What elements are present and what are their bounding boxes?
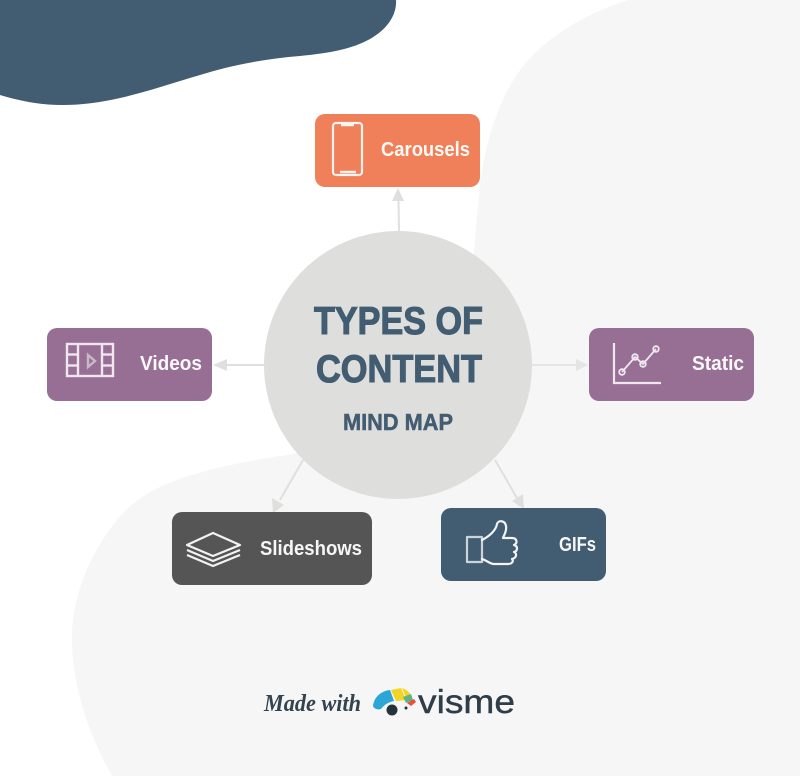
- made with text: Made with: [263, 691, 361, 717]
- label: Videos: [140, 353, 202, 375]
- branding: Made with Visme: [263, 683, 515, 720]
- label: Carousels: [381, 139, 470, 161]
- icon: visme logo: [373, 688, 416, 716]
- label: Slideshows: [260, 538, 362, 560]
- arrow: to Slideshows: [272, 460, 303, 513]
- node: Static: [589, 328, 754, 401]
- arrow: to Carousels: [392, 188, 404, 232]
- icon: line chart: [614, 343, 661, 383]
- icon: film strip: [67, 344, 113, 376]
- node: GIFs: [441, 508, 606, 581]
- subtitle: MIND MAP: [343, 409, 453, 435]
- arrow: to Static: [531, 359, 588, 371]
- icon: layers: [187, 533, 240, 566]
- node: Carousels: [315, 114, 480, 187]
- label: Static: [692, 353, 744, 375]
- title: CONTENT: [316, 348, 482, 391]
- central circle: title: [264, 231, 532, 499]
- visme wordmark: visme: [418, 683, 515, 720]
- title: TYPES OF: [314, 300, 483, 343]
- node: Slideshows: [172, 512, 372, 585]
- title: [314, 300, 483, 391]
- icon: smartphone: [333, 123, 362, 175]
- arrow: to GIFs: [495, 460, 524, 509]
- arrow: to Videos: [213, 359, 266, 371]
- label: GIFs: [559, 534, 596, 556]
- decorative blob: top left: [0, 0, 396, 105]
- icon: thumbs up: [467, 521, 517, 564]
- node: Videos: [47, 328, 212, 401]
